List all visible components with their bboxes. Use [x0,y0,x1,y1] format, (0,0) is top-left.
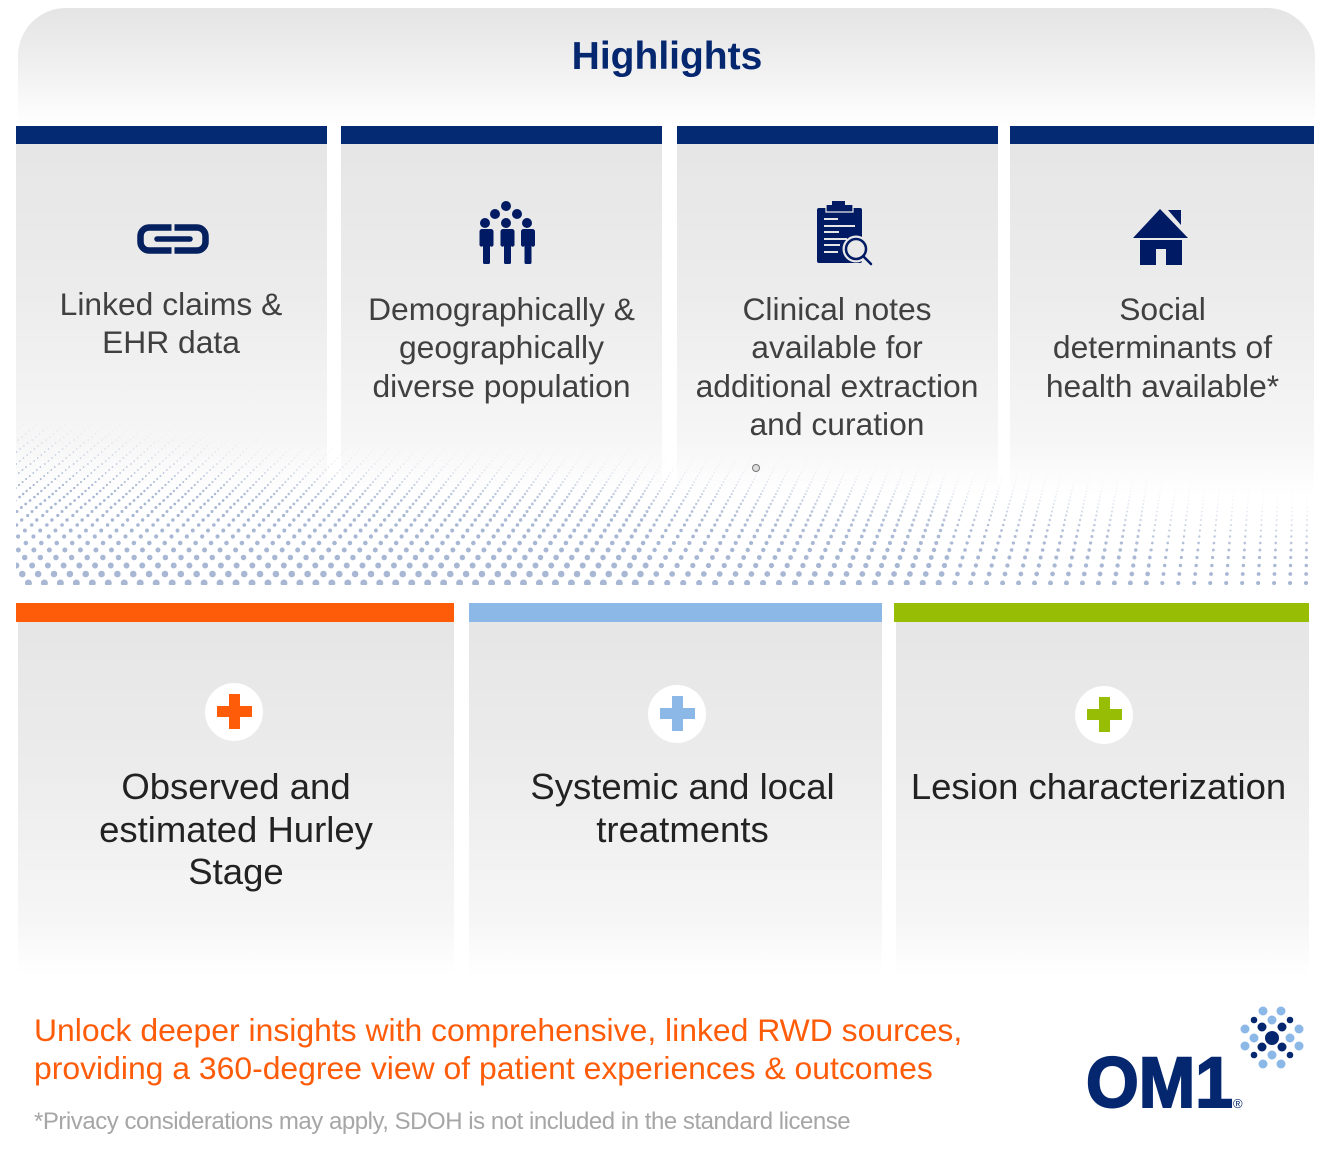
text: diverse population: diverse population [372,368,631,404]
decorative cursor mark [752,464,760,472]
header band [18,8,1315,125]
callout text [34,1012,962,1086]
logo: OM1 [1086,1006,1304,1123]
icon: house [1133,209,1188,265]
plus vertical [672,696,683,731]
text: treatments: Systemic and local [530,766,835,807]
text: treatments [530,766,835,850]
text: clinical notes: available for [751,329,923,365]
logo dot burst [1240,1006,1304,1068]
callout text: providing a 360-degree view of patient experiences & outcomes [34,1050,933,1086]
panel bar [16,126,327,144]
text: Hurley stage: Observed and [121,766,351,807]
logo registered mark: ® [1233,1096,1243,1111]
text: diverse population: geographically [399,329,604,365]
text: Hurley stage: estimated Hurley [99,808,373,850]
text: diverse population: Demographically & [368,291,635,327]
text: clinical notes: and curation [749,406,924,442]
icon: clipboard with magnifier [817,201,872,266]
panel: linked claims and EHR data [16,126,327,496]
text: social determinants [1046,291,1279,404]
panel: diverse population [341,126,662,496]
callout text: Unlock deeper insights with comprehensive, linked RWD sources, [34,1012,962,1048]
text: social determinants: health available* [1046,368,1279,404]
icon: orange plus [205,683,263,741]
text: clinical notes [696,291,978,442]
text: treatments: treatments [596,808,769,850]
plus horizontal [1087,709,1122,720]
bar: orange [16,603,454,622]
title: Highlights [572,35,762,78]
logo wordmark: OM1 [1086,1044,1233,1123]
text: Hurley stage: Stage [188,851,284,892]
plus vertical [229,694,240,729]
icon: green plus [1075,686,1133,744]
footnote: *Privacy considerations may apply, SDOH is not included in the standard license [34,1108,850,1134]
text: diverse population [368,291,635,404]
text: linked claims [60,286,282,360]
bar: green [894,603,1309,622]
panel: Hurley stage [18,604,454,976]
text: linked claims: EHR data [102,324,240,360]
plus vertical [1099,697,1110,732]
plus horizontal [217,706,252,717]
icon: people group [480,201,535,264]
text: clinical notes: additional extraction [696,368,978,404]
text: lesion characterization: Lesion characterization [911,766,1286,807]
plus horizontal [660,708,695,719]
panel: lesion characterization [896,604,1309,976]
text: Hurley stage [99,766,373,892]
text: clinical notes: Clinical notes [742,291,932,327]
panel: social determinants [1010,126,1314,496]
panel bar [677,126,998,144]
panel bar [1010,126,1314,144]
panel bar [341,126,662,144]
text: social determinants: determinants of [1053,329,1272,365]
panel: clinical notes [677,126,998,496]
bar: blue [469,603,882,622]
icon: blue plus [648,685,706,743]
text: linked claims: Linked claims & [60,286,282,322]
text: social determinants: Social [1119,291,1206,327]
panel: treatments [469,604,882,976]
icon: chain link [137,224,209,254]
dot wave pattern [16,424,1308,585]
